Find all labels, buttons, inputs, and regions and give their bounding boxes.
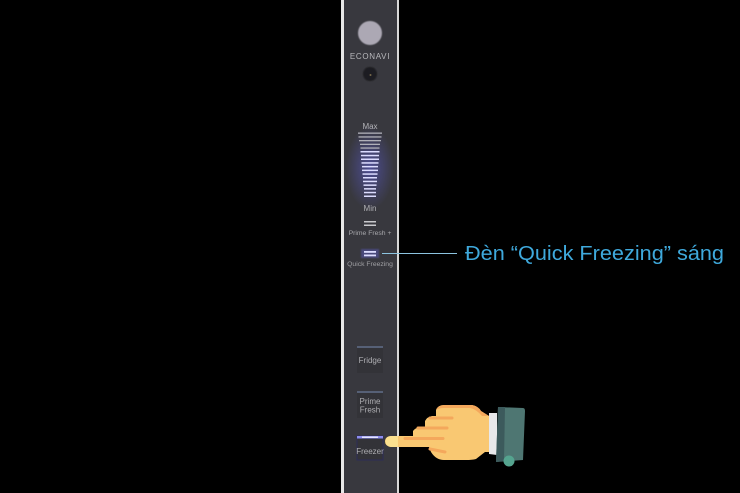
chart: level indicator bars	[346, 126, 394, 210]
icon: round sensor button	[358, 21, 382, 45]
button: Freezer lit: Freezer	[356, 447, 384, 456]
button: Prime Fresh	[357, 391, 383, 418]
panel: control strip	[341, 0, 399, 493]
button: Freezer lit	[356, 436, 384, 460]
callout text: Đèn “Quick Freezing” sáng	[465, 242, 724, 265]
indicator: Prime Fresh +	[364, 221, 376, 226]
fingertip highlight	[385, 436, 398, 447]
label: Quick Freezing: Quick Freezing	[347, 261, 393, 268]
label: Prime Fresh +: Prime Fresh +	[349, 230, 391, 237]
shirt cuff	[489, 413, 497, 455]
callout line	[382, 252, 457, 254]
sleeve button	[504, 456, 514, 466]
label: Min: Min	[364, 204, 376, 213]
indicator: Quick Freezing lit	[361, 249, 379, 258]
icon: hand pressing button	[385, 405, 525, 466]
top edge shading	[436, 405, 489, 416]
label: Max: Max	[362, 122, 378, 131]
button: Fridge: Fridge	[359, 356, 382, 365]
jacket sleeve	[496, 407, 525, 462]
button: Prime Fresh: Fresh	[360, 406, 380, 414]
button: Fridge	[357, 346, 383, 373]
icon: sensor lens	[363, 67, 377, 81]
hand crease lines	[405, 418, 452, 452]
button: Prime Fresh: Prime	[360, 397, 381, 406]
label: ECONAVI: ECONAVI	[350, 52, 390, 61]
hand palm and fingers	[385, 405, 490, 460]
